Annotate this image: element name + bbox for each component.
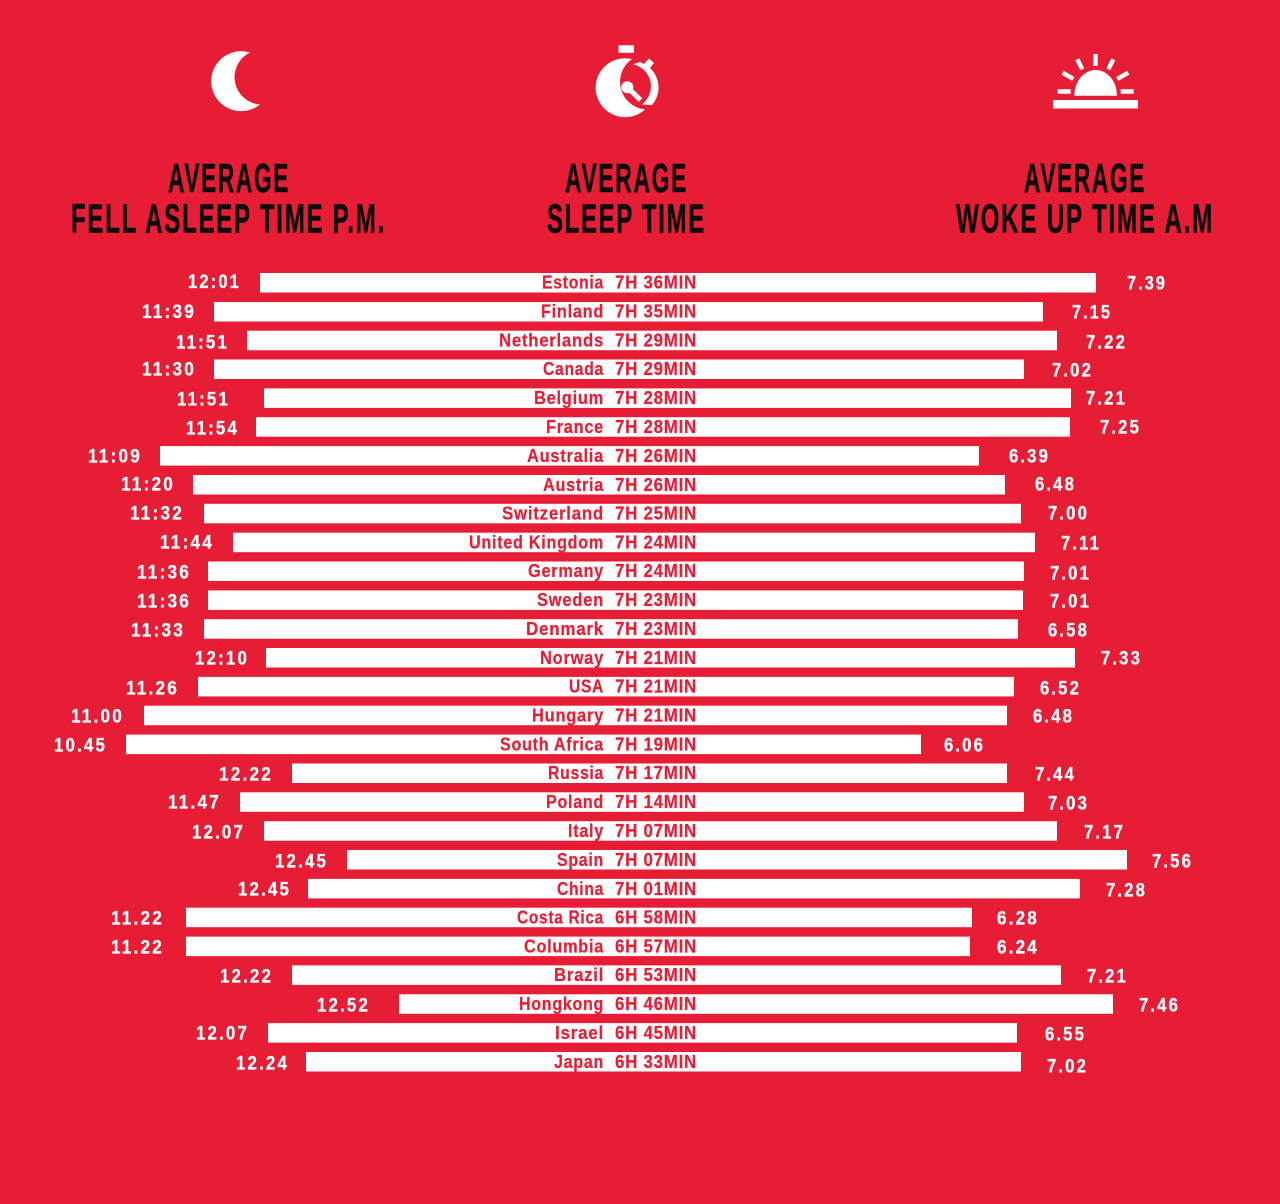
row: Norway	[195, 648, 1142, 670]
row: Denmark: 11:33	[131, 620, 185, 642]
row: Brazil: 7.21	[1087, 966, 1128, 988]
row: Spain: 7H 07MIN	[615, 850, 697, 870]
row: Spain	[275, 850, 1193, 872]
row: Spain: Spain	[557, 850, 604, 870]
row: Belgium: Belgium	[534, 388, 604, 408]
row: Hungary: Hungary	[532, 706, 604, 726]
row: France: 7.25	[1100, 416, 1141, 438]
row: Italy: 12.07	[192, 822, 245, 844]
row: Russia: Russia	[548, 763, 604, 783]
icon: moon	[211, 51, 260, 111]
row: Russia: 7.44	[1035, 764, 1076, 786]
row: Germany: 7H 24MIN	[615, 561, 697, 581]
row: Israel: 12.07	[196, 1022, 249, 1044]
row: Poland: Poland	[546, 792, 604, 812]
row: South Africa: 7H 19MIN	[615, 734, 697, 754]
row: Russia	[219, 763, 1076, 786]
row: Sweden: 7H 23MIN	[615, 590, 697, 610]
row: Canada	[142, 358, 1093, 382]
heading: woke up time	[956, 155, 1214, 242]
row: Italy	[192, 821, 1125, 844]
row: Denmark: 6.58	[1048, 620, 1089, 642]
icon: stopwatch	[596, 45, 659, 117]
row: United Kingdom: 7H 24MIN	[615, 532, 697, 552]
row: Germany: 7.01	[1050, 562, 1091, 584]
row: Norway: 7H 21MIN	[615, 648, 697, 668]
row: China: 12.45	[238, 878, 291, 900]
row: Israel: Israel	[555, 1023, 604, 1043]
row: Estonia	[188, 271, 1167, 294]
row: USA: 7H 21MIN	[615, 676, 697, 696]
row: South Africa: 10.45	[54, 734, 107, 756]
row: Canada: 7H 29MIN	[615, 359, 697, 379]
row: Canada: 11:30	[142, 358, 196, 380]
row: Japan: 7.02	[1047, 1056, 1088, 1078]
row: Canada: Canada	[543, 359, 604, 379]
row: Russia: 7H 17MIN	[615, 763, 697, 783]
row: Australia: 11:09	[88, 446, 142, 468]
row: Belgium	[177, 388, 1127, 410]
row: France: 11:54	[186, 418, 239, 440]
row: United Kingdom: United Kingdom	[469, 532, 604, 552]
row: Austria: 6.48	[1035, 474, 1076, 496]
heading: sleep time	[547, 155, 706, 242]
chart: sleep schedule by country	[54, 271, 1193, 1078]
row: Columbia: Columbia	[524, 936, 604, 956]
row: Estonia: 7H 36MIN	[615, 272, 697, 292]
row: Costa Rica: 6H 58MIN	[615, 908, 697, 928]
row: USA: 6.52	[1040, 678, 1081, 700]
row: Columbia: 6.24	[997, 936, 1039, 958]
row: Norway: 12:10	[195, 648, 249, 670]
row: South Africa	[54, 734, 985, 756]
row: South Africa: South Africa	[500, 734, 604, 754]
row: Hongkong: Hongkong	[519, 994, 604, 1014]
row: Belgium: 11:51	[177, 388, 230, 410]
row: Italy: 7H 07MIN	[615, 821, 697, 841]
row: Australia	[88, 446, 1050, 468]
row: Brazil	[220, 965, 1128, 988]
row: Belgium: 7H 28MIN	[615, 388, 697, 408]
row: Estonia: 12:01	[188, 271, 241, 293]
row: USA: USA	[569, 676, 604, 696]
row: Austria: 7H 26MIN	[615, 475, 697, 495]
row: Germany: Germany	[528, 561, 604, 581]
row: United Kingdom: 11:44	[160, 532, 214, 554]
row: Italy: Italy	[568, 821, 604, 841]
row: Brazil: Brazil	[554, 965, 604, 985]
row: Netherlands: Netherlands	[499, 330, 604, 350]
row: USA	[126, 676, 1081, 700]
row: France	[186, 416, 1141, 440]
row: China	[238, 878, 1147, 902]
row: Finland: 7.15	[1072, 302, 1112, 324]
row: Netherlands: 11:51	[176, 332, 229, 354]
row: Hongkong	[317, 994, 1180, 1016]
row: Netherlands: 7H 29MIN	[615, 330, 697, 350]
heading: fell asleep time: AVERAGE	[168, 155, 290, 201]
row: Switzerland	[130, 502, 1089, 524]
row: Denmark: 7H 23MIN	[615, 619, 697, 639]
row: Sweden	[137, 590, 1091, 612]
row: Israel: 6.55	[1045, 1024, 1086, 1046]
row: Sweden: 11:36	[137, 590, 191, 612]
row: Austria: Austria	[543, 475, 604, 495]
row: Estonia: 7.39	[1127, 272, 1167, 294]
row: Hongkong: 6H 46MIN	[615, 994, 697, 1014]
row: Switzerland: 11:32	[130, 502, 184, 524]
row: Hongkong: 12.52	[317, 994, 370, 1016]
row: Israel: 6H 45MIN	[615, 1023, 697, 1043]
row: China: China	[557, 879, 604, 899]
row: Finland: 11:39	[142, 301, 196, 323]
row: Poland: 7.03	[1048, 792, 1089, 814]
row: Costa Rica: Costa Rica	[517, 908, 604, 928]
row: Costa Rica	[111, 908, 1039, 930]
row: Australia: 6.39	[1009, 446, 1050, 468]
row: Poland: 11.47	[168, 792, 221, 814]
row: Columbia: 6H 57MIN	[615, 936, 697, 956]
row: Hongkong: 7.46	[1139, 994, 1180, 1016]
row: Canada: 7.02	[1052, 360, 1093, 382]
row: USA: 11.26	[126, 678, 179, 700]
row: Germany	[137, 561, 1091, 584]
row: Russia: 12.22	[219, 764, 273, 786]
row: Australia: 7H 26MIN	[615, 446, 697, 466]
row: Columbia: 11.22	[111, 936, 164, 958]
row: Costa Rica: 6.28	[997, 908, 1039, 930]
row: Brazil: 12.22	[220, 966, 273, 988]
row: Columbia	[111, 936, 1039, 958]
row: Norway: 7.33	[1101, 648, 1142, 670]
row: Estonia: Estonia	[542, 272, 604, 292]
row: China: 7H 01MIN	[615, 879, 697, 899]
row: Austria: 11:20	[121, 474, 175, 496]
row: China: 7.28	[1106, 880, 1147, 902]
row: Japan: Japan	[554, 1052, 604, 1072]
row: United Kingdom	[160, 532, 1101, 554]
row: Switzerland: 7.00	[1048, 502, 1089, 524]
heading: sleep time: SLEEP TIME	[547, 196, 706, 242]
row: South Africa: 6.06	[944, 734, 985, 756]
row: Spain: 12.45	[275, 850, 328, 872]
row: Israel	[196, 1022, 1086, 1046]
row: United Kingdom: 7.11	[1061, 532, 1101, 554]
row: Denmark	[131, 619, 1089, 642]
row: Belgium: 7.21	[1086, 388, 1127, 410]
heading: fell asleep time: FELL ASLEEP TIME P.M.	[71, 196, 386, 242]
row: Netherlands	[176, 330, 1127, 354]
row: Japan: 12.24	[236, 1052, 289, 1074]
row: Costa Rica: 11.22	[111, 908, 164, 930]
row: Italy: 7.17	[1084, 822, 1125, 844]
row: Switzerland: Switzerland	[502, 504, 604, 524]
row: Denmark: Denmark	[526, 619, 604, 639]
row: France: France	[546, 417, 604, 437]
row: Hungary	[71, 706, 1074, 728]
row: Japan	[236, 1052, 1088, 1078]
row: Switzerland: 7H 25MIN	[615, 504, 697, 524]
row: Netherlands: 7.22	[1086, 332, 1127, 354]
row: Hungary: 7H 21MIN	[615, 706, 697, 726]
row: Germany: 11:36	[137, 562, 191, 584]
icon: sunrise	[1053, 54, 1138, 108]
heading: woke up time: AVERAGE	[1024, 155, 1146, 201]
row: Sweden: Sweden	[537, 590, 604, 610]
row: Hungary: 11.00	[71, 706, 124, 728]
row: Poland	[168, 792, 1089, 814]
row: France: 7H 28MIN	[615, 417, 697, 437]
row: Norway: Norway	[540, 648, 604, 668]
heading: sleep time: AVERAGE	[565, 155, 688, 201]
row: Austria	[121, 474, 1076, 496]
row: Finland: 7H 35MIN	[615, 302, 697, 322]
row: Australia: Australia	[527, 446, 604, 466]
row: Poland: 7H 14MIN	[615, 792, 697, 812]
row: Finland	[142, 301, 1112, 324]
row: Hungary: 6.48	[1033, 706, 1074, 728]
heading: fell asleep time	[71, 155, 386, 242]
row: Sweden: 7.01	[1050, 590, 1091, 612]
row: Spain: 7.56	[1152, 850, 1193, 872]
row: Brazil: 6H 53MIN	[615, 965, 697, 985]
row: Finland: Finland	[541, 302, 604, 322]
row: Japan: 6H 33MIN	[615, 1052, 697, 1072]
